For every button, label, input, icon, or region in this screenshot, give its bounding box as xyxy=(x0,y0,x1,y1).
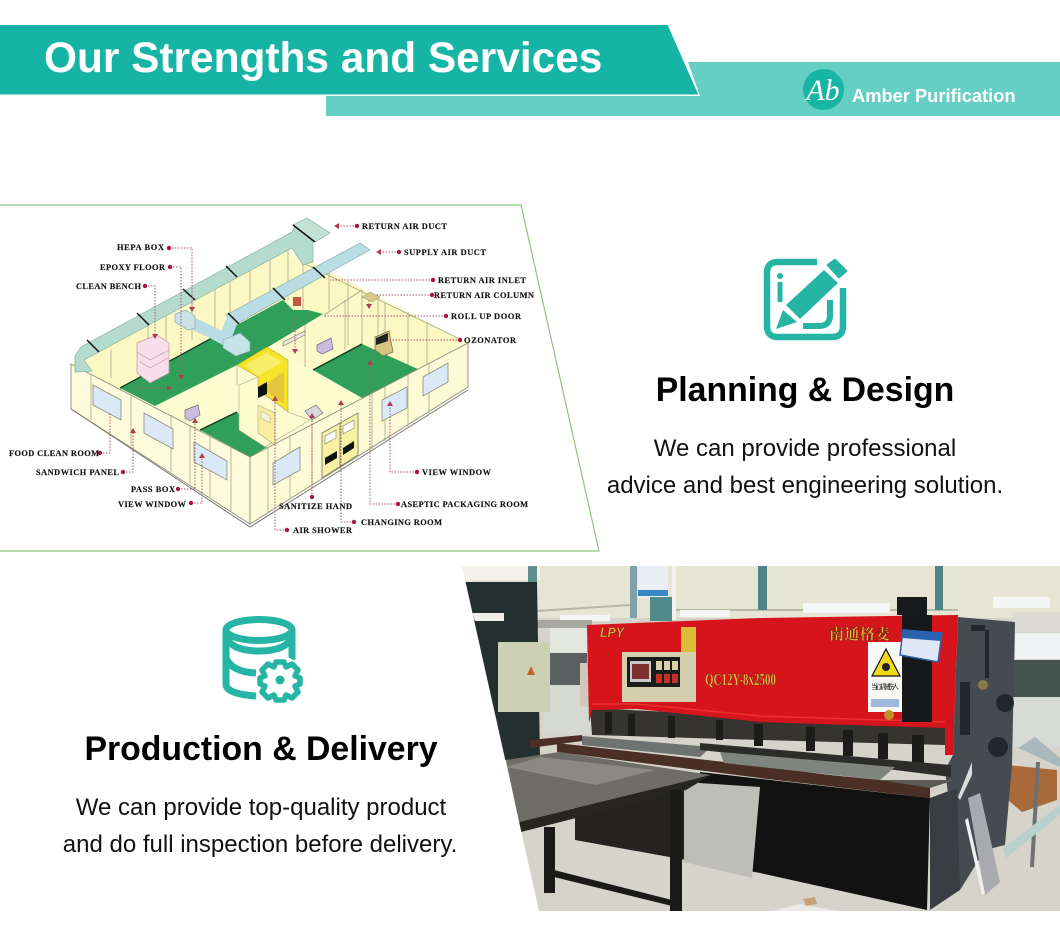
brand name: Amber Purification xyxy=(852,85,1016,106)
work table xyxy=(506,752,711,912)
diagram labels: RETURN AIR COLUMN xyxy=(434,291,534,300)
leader arrows xyxy=(130,223,393,458)
warning sign: 当心机械伤人 xyxy=(871,682,899,691)
yellow room xyxy=(237,347,310,447)
control panel xyxy=(622,652,696,702)
dark teal title ribbon xyxy=(0,24,699,95)
frame fittings xyxy=(960,625,1014,757)
panel: header banner xyxy=(0,24,1060,116)
yellow emblem xyxy=(884,710,894,720)
logo badge xyxy=(803,69,844,110)
diagram labels: SANITIZE HAND xyxy=(279,502,352,511)
grey side frame xyxy=(945,617,1015,890)
panel: planning and design xyxy=(607,260,1003,499)
double door xyxy=(322,413,358,478)
red machine body xyxy=(587,615,958,755)
photo: shearing machine in factory xyxy=(460,565,1060,916)
icon: pencil and note xyxy=(767,260,846,337)
diagram labels: ROLL UP DOOR xyxy=(451,312,522,321)
panel: cleanroom diagram xyxy=(0,205,599,551)
building illustration xyxy=(71,218,468,532)
upper rails xyxy=(530,735,582,748)
diagram labels: VIEW WINDOW xyxy=(118,500,187,509)
side stand xyxy=(1003,737,1060,867)
Chinese brand: 南通格麦 xyxy=(829,625,890,643)
wooden crates xyxy=(1007,765,1057,812)
left dark machine xyxy=(465,582,540,760)
equipment xyxy=(185,292,393,421)
diagram labels: HEPA BOX xyxy=(117,243,164,252)
description xyxy=(607,435,1003,499)
description: We can provide professional xyxy=(654,435,956,462)
description: We can provide top-quality product xyxy=(76,794,447,821)
diagram labels: EPOXY FLOOR xyxy=(100,263,166,272)
diagram labels: CLEAN BENCH xyxy=(76,282,141,291)
brass valve xyxy=(978,680,988,690)
light teal ribbon xyxy=(326,62,1060,116)
title: Our Strengths and Services xyxy=(44,34,602,81)
leaning sheets xyxy=(968,793,1000,895)
factory background xyxy=(460,565,1060,916)
blue tag xyxy=(900,630,942,662)
paper notice xyxy=(580,663,589,707)
description xyxy=(63,794,457,858)
diagram labels: AIR SHOWER xyxy=(293,526,353,535)
description: advice and best engineering solution. xyxy=(607,472,1003,499)
dark blade zone xyxy=(590,708,945,745)
clean bench xyxy=(137,335,169,383)
black column xyxy=(902,615,932,722)
windows xyxy=(93,385,121,420)
floor offcuts xyxy=(773,897,837,911)
heading: Planning & Design xyxy=(656,371,954,409)
brand mark on machine: LPY xyxy=(600,624,625,640)
leader dots xyxy=(98,224,462,532)
diagram labels: VIEW WINDOW xyxy=(422,468,492,477)
logo badge: Ab xyxy=(804,74,840,107)
diagram labels: SANDWICH PANEL xyxy=(36,468,119,477)
diagram frame xyxy=(0,205,599,551)
diagram labels: ASEPTIC PACKAGING ROOM xyxy=(401,500,528,509)
diagram labels: CHANGING ROOM xyxy=(361,518,442,527)
grey base side xyxy=(930,788,960,910)
steel plate xyxy=(684,782,760,878)
diagram labels: RETURN AIR INLET xyxy=(438,276,526,285)
black base xyxy=(690,772,930,910)
diagram labels: PASS BOX xyxy=(131,485,175,494)
panel: production and delivery xyxy=(63,620,457,858)
heading: Production & Delivery xyxy=(84,730,438,768)
return air duct xyxy=(75,218,330,372)
electrical cabinet xyxy=(498,642,550,712)
description: and do full inspection before delivery. xyxy=(63,831,457,858)
yellow sticker xyxy=(681,627,696,652)
diagram labels: RETURN AIR DUCT xyxy=(362,222,447,231)
model number: QC12Y-8x2500 xyxy=(705,670,776,689)
green floors xyxy=(120,300,323,406)
front walls xyxy=(71,364,250,524)
warning sign xyxy=(868,642,903,712)
supply air duct xyxy=(175,243,370,356)
leader lines xyxy=(100,226,460,530)
diagram labels xyxy=(9,222,534,535)
diagram labels: SUPPLY AIR DUCT xyxy=(404,248,486,257)
diagram labels: OZONATOR xyxy=(464,336,517,345)
diagram labels: FOOD CLEAN ROOM xyxy=(9,449,99,458)
icon: database and gear xyxy=(226,620,304,704)
